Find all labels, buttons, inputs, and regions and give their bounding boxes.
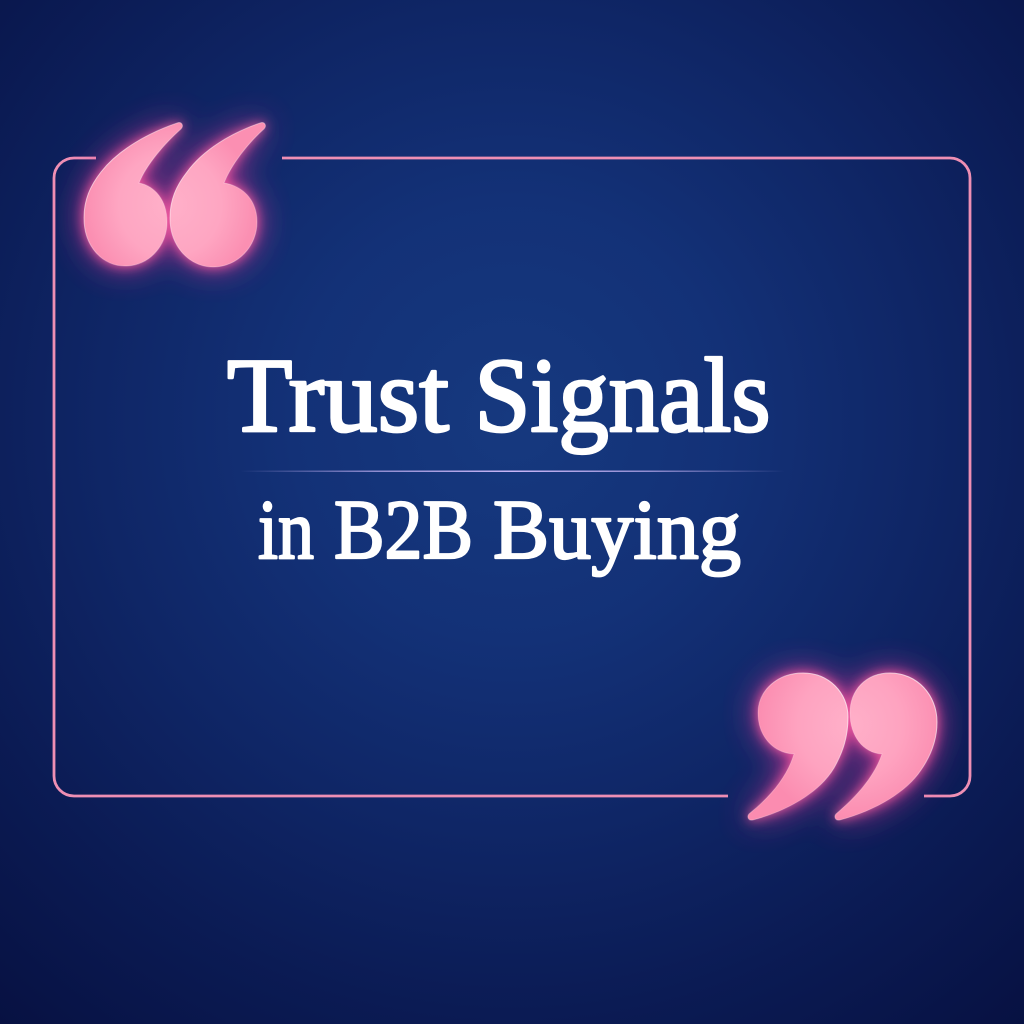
title line 1: Trust <box>227 337 449 454</box>
title line 2: B2B <box>334 483 473 577</box>
title line 1: Signals <box>474 337 770 454</box>
title line 2: in <box>258 483 314 577</box>
title line 1 <box>227 337 770 454</box>
title line 2 <box>258 483 741 577</box>
icon: opening quote mark <box>84 123 265 267</box>
icon: closing quote mark <box>748 673 937 820</box>
divider <box>240 470 785 472</box>
title line 2: Buying <box>493 483 741 577</box>
frame border <box>54 158 970 796</box>
